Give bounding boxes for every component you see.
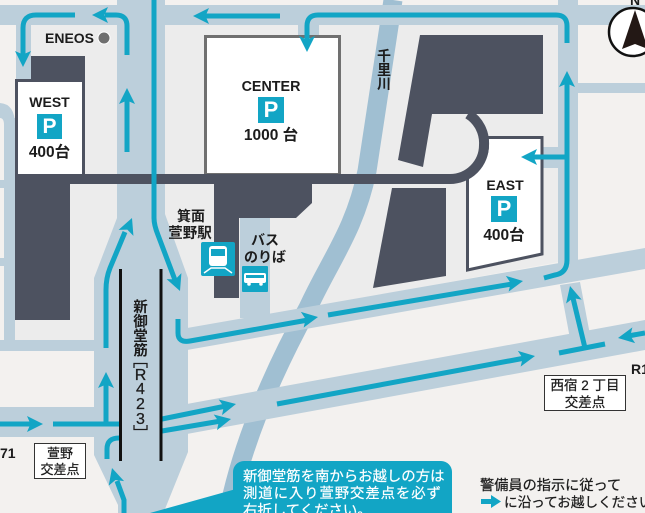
label: R171 west: 71 <box>0 445 16 461</box>
label: Shin-Midosuji R423 <box>133 299 148 430</box>
icon: train <box>201 242 235 276</box>
callout: approach from south: 新御堂筋を南からお越しの方は <box>243 468 444 485</box>
label: Minoh Kayano station: 箕面 <box>177 208 205 224</box>
panel: west parking <box>16 80 84 176</box>
east label: EAST <box>486 177 524 193</box>
label: Shin-Midosuji R423: 4 <box>136 381 145 398</box>
label: Kayano intersection: 交差点 <box>40 462 80 477</box>
label: Shin-Midosuji R423: 新 <box>133 299 148 316</box>
callout: approach from south <box>150 461 452 513</box>
label: bus stop <box>244 232 286 265</box>
label: Shin-Midosuji R423: 3 <box>136 411 145 428</box>
center P icon: P <box>264 97 278 122</box>
label: Minoh Kayano station: 萱野駅 <box>168 225 212 242</box>
east P icon: P <box>497 196 511 221</box>
river: Senri River <box>232 0 393 495</box>
icon: bus <box>242 266 268 292</box>
panel: east parking <box>468 138 542 270</box>
label: Senri River: 里 <box>377 62 391 78</box>
center label: CENTER <box>242 79 301 95</box>
Shin-Midosuji median lines <box>120 269 161 461</box>
label: Nishiyado 2-chome intersection: 交差点 <box>565 395 605 410</box>
callout: approach from south: 測道に入り萱野交差点を必ず <box>243 485 442 502</box>
light site ground <box>15 25 558 340</box>
label: ENEOS: ENEOS <box>45 30 94 46</box>
label: bus stop: バス <box>251 232 279 248</box>
label: Shin-Midosuji R423: 筋 <box>133 342 148 360</box>
label: Shin-Midosuji R423: 2 <box>136 396 145 413</box>
label: Shin-Midosuji R423: R <box>135 367 146 384</box>
label: Senri River: 川 <box>377 76 391 92</box>
label: Nishiyado 2-chome intersection <box>544 376 626 410</box>
icon: north arrow <box>609 0 645 56</box>
label: Kayano intersection <box>34 444 86 478</box>
west capacity: 400台 <box>29 142 70 161</box>
label: Senri River <box>377 48 391 92</box>
label: Shin-Midosuji R423: 堂 <box>133 328 148 345</box>
label: Shin-Midosuji R423: 御 <box>133 312 148 330</box>
center capacity: 1000 台 <box>244 125 298 144</box>
label: Minoh Kayano station <box>168 208 212 242</box>
panel: center parking <box>206 36 340 174</box>
dark buildings <box>15 35 543 320</box>
legend note <box>480 478 645 510</box>
west label: WEST <box>29 94 70 110</box>
label: Nishiyado 2-chome intersection: 西宿 2 丁目 <box>550 378 620 393</box>
east capacity: 400台 <box>483 225 525 244</box>
west P icon: P <box>42 115 57 138</box>
label: bus stop: のりば <box>244 249 286 265</box>
connecting deck <box>15 114 484 179</box>
label: Kayano intersection: 萱野 <box>47 446 73 461</box>
legend note: 警備員の指示に従って <box>480 478 621 494</box>
label: Senri River: 千 <box>377 48 391 64</box>
